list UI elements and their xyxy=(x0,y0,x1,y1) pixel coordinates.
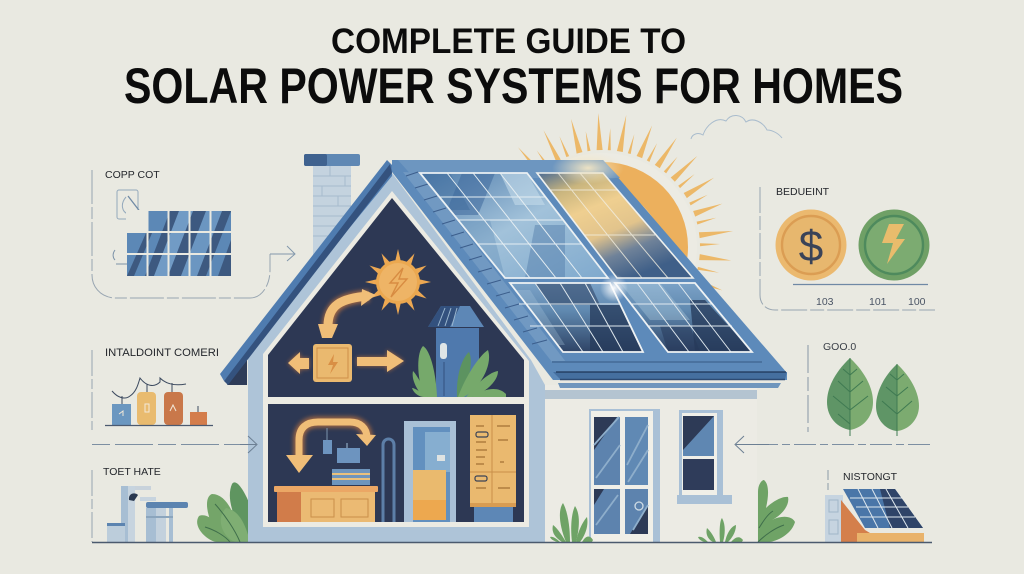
lens flare xyxy=(600,274,628,302)
icon: battery stack xyxy=(332,469,370,485)
window xyxy=(677,410,732,504)
solar panel: lower right xyxy=(600,274,752,352)
front door xyxy=(589,409,660,542)
icon: water fixtures xyxy=(107,486,188,542)
title: COMPLETE GUIDE TO xyxy=(331,22,686,61)
solar panel: upper right with glare xyxy=(537,152,693,278)
icon: leaves xyxy=(827,358,919,436)
axis with values: 101 xyxy=(869,296,887,308)
icon: interior door xyxy=(404,421,456,522)
house walls xyxy=(248,173,757,542)
axis with values: 100 xyxy=(908,296,926,308)
icon: small meter devices xyxy=(323,428,360,463)
icon: green energy coin xyxy=(858,210,930,280)
panel: installation cost xyxy=(92,347,219,430)
label: installation: INTALDOINT COMERI xyxy=(105,347,219,359)
plant: right of house xyxy=(758,480,795,542)
icon: dollar coin: $ xyxy=(799,222,823,271)
label: bedueint: BEDUEINT xyxy=(776,186,830,198)
glare over roof ridge xyxy=(552,152,624,184)
roof: front gable edge xyxy=(220,160,392,385)
icon: desk xyxy=(274,486,378,522)
icon: outlet box xyxy=(117,190,148,222)
arrow: sun to inverter xyxy=(318,289,376,338)
plants: attic xyxy=(412,346,506,397)
label: toet hate: TOET HATE xyxy=(103,466,161,478)
roof: main slope with shingles xyxy=(392,160,787,388)
plants: beside door and window xyxy=(550,503,743,542)
icon: dollar coin xyxy=(776,210,846,280)
plant: left of house xyxy=(197,482,250,542)
arrow: lower loop xyxy=(286,422,376,473)
ground line xyxy=(92,542,932,544)
icon: battery cabinet xyxy=(470,415,516,522)
icon: blue utility tower xyxy=(428,306,484,397)
solar panel: upper left xyxy=(420,173,608,278)
sun behind roof xyxy=(509,113,733,341)
axis with values xyxy=(793,284,928,308)
interior: attic room xyxy=(268,198,524,397)
panel: environment xyxy=(808,341,919,436)
chart: cost columns xyxy=(105,378,213,426)
icon: small solar house xyxy=(825,489,924,542)
label: goo.0: GOO.0 xyxy=(823,341,856,353)
icon: cloud outline xyxy=(691,115,782,139)
arrow: inverter right xyxy=(357,350,404,372)
axis with values: 103 xyxy=(816,296,834,308)
panel: installation example xyxy=(825,470,924,542)
solar panel: lower left xyxy=(510,283,643,352)
icon: inner sun with bolt xyxy=(365,249,431,315)
arrow: to house interior xyxy=(92,436,257,453)
interior: lower room xyxy=(268,404,524,522)
label: nistongt: NISTONGT xyxy=(843,471,898,483)
panel: benefits xyxy=(760,186,935,310)
arrow: inverter left xyxy=(288,352,309,374)
arrow: to house window xyxy=(735,436,930,453)
chimney xyxy=(304,154,360,262)
icon: solar panel grid xyxy=(113,210,231,276)
panel: toilet and fixtures xyxy=(92,466,188,542)
icon: conduit pipe xyxy=(383,439,394,522)
title xyxy=(124,22,903,114)
panel: system cost xyxy=(92,169,295,298)
label: copp cot: COPP COT xyxy=(105,169,160,181)
icon: inverter box xyxy=(313,344,352,382)
